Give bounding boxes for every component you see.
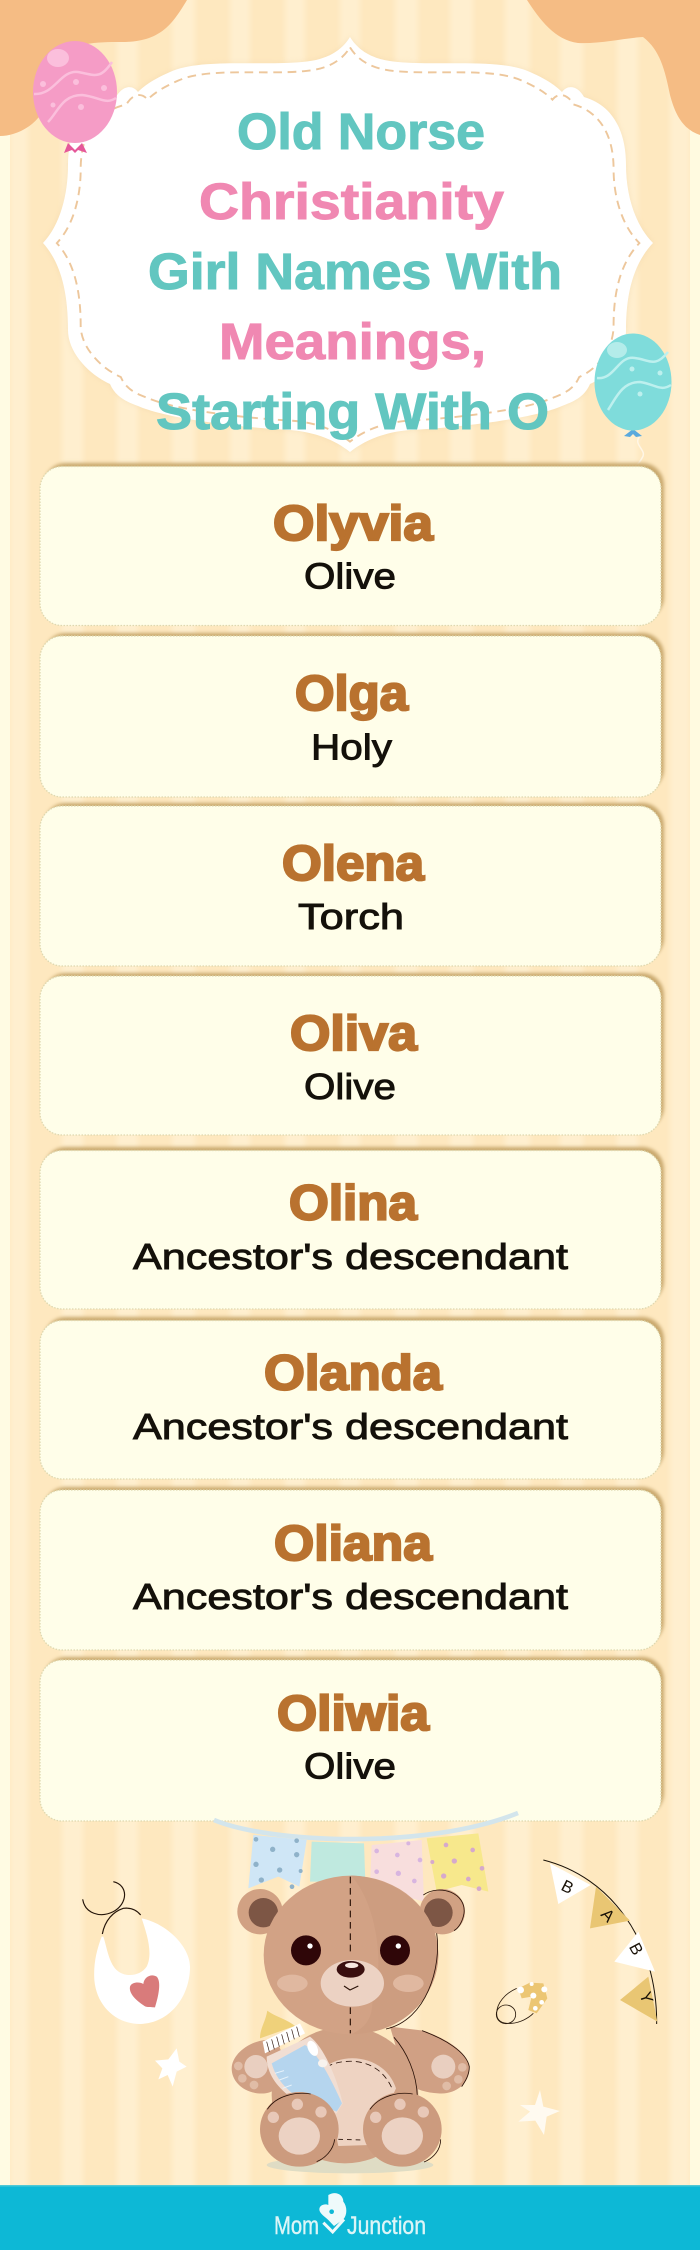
card 8: Oliwia: Olive bbox=[304, 1746, 396, 1786]
heading: Starting With O bbox=[156, 383, 549, 440]
card 2: Olga bbox=[40, 633, 664, 797]
bear shadow bbox=[267, 2157, 433, 2173]
card 4: Oliva: Olive bbox=[304, 1066, 396, 1107]
card 2: Olga: Holy bbox=[311, 726, 392, 768]
logo wordmark bbox=[274, 2212, 426, 2240]
card 2: Olga: Olga bbox=[295, 667, 409, 721]
card 1: Olyvia bbox=[40, 463, 664, 626]
card 7: Oliana bbox=[40, 1487, 664, 1650]
card 3: Olena bbox=[40, 803, 664, 966]
icon: right star bbox=[518, 2090, 560, 2135]
top right orange drape bbox=[527, 0, 700, 135]
icon: left star bbox=[155, 2048, 187, 2087]
logo icon bbox=[319, 2193, 346, 2232]
title frame bbox=[43, 37, 653, 452]
top left orange drape bbox=[0, 0, 187, 136]
baby pennant banner: Y bbox=[636, 1989, 657, 2006]
card 6: Olanda: Olanda bbox=[264, 1346, 443, 1400]
footer bar bbox=[0, 2185, 700, 2250]
baby bottle bbox=[260, 2011, 343, 2113]
icon: pink balloon bbox=[33, 41, 117, 153]
icon: baby bib bbox=[83, 1882, 190, 2024]
card 1: Olyvia: Olyvia bbox=[273, 497, 434, 551]
teddy bear with bottle bbox=[232, 1876, 469, 2173]
bear body bbox=[272, 2027, 418, 2163]
card 7: Oliana: Ancestor's descendant bbox=[133, 1576, 568, 1617]
card 5: Olina: Olina bbox=[289, 1176, 418, 1230]
card 3: Olena: Olena bbox=[282, 837, 425, 891]
icon: safety pin bbox=[496, 1982, 547, 2024]
card 5: Olina bbox=[40, 1147, 664, 1309]
card 8: Oliwia: Oliwia bbox=[277, 1687, 430, 1741]
icon: teal balloon bbox=[594, 334, 672, 467]
card 6: Olanda: Ancestor's descendant bbox=[133, 1406, 568, 1447]
bear arms bbox=[232, 2027, 469, 2093]
heading: Girl Names With bbox=[148, 243, 562, 300]
baby pennant banner: B bbox=[625, 1940, 647, 1958]
heading: Christianity bbox=[199, 173, 505, 230]
card 4: Oliva: Oliva bbox=[290, 1007, 418, 1061]
card 1: Olyvia: Olive bbox=[304, 556, 396, 596]
heading: Meanings, bbox=[219, 313, 486, 370]
logo wordmark: Mom bbox=[274, 2212, 319, 2240]
bear feet bbox=[260, 2092, 442, 2167]
bear belly bbox=[325, 2058, 396, 2146]
card 5: Olina: Ancestor's descendant bbox=[133, 1236, 568, 1277]
heading: Old Norse bbox=[237, 103, 485, 160]
card 6: Olanda bbox=[40, 1317, 664, 1479]
logo wordmark: Junction bbox=[347, 2212, 426, 2240]
card 7: Oliana: Oliana bbox=[274, 1517, 433, 1571]
card 4: Oliva bbox=[40, 973, 664, 1135]
baby pennant banner bbox=[543, 1860, 657, 2024]
heading bbox=[148, 103, 562, 440]
card 8: Oliwia bbox=[40, 1657, 664, 1821]
logo: MomJunction bbox=[274, 2193, 426, 2240]
baby pennant banner: B bbox=[558, 1876, 577, 1898]
bunting flags bbox=[214, 1813, 518, 1902]
bear head bbox=[264, 1876, 438, 2034]
baby pennant banner: A bbox=[597, 1905, 619, 1927]
card 3: Olena: Torch bbox=[298, 896, 404, 937]
bear ears bbox=[237, 1889, 465, 1934]
